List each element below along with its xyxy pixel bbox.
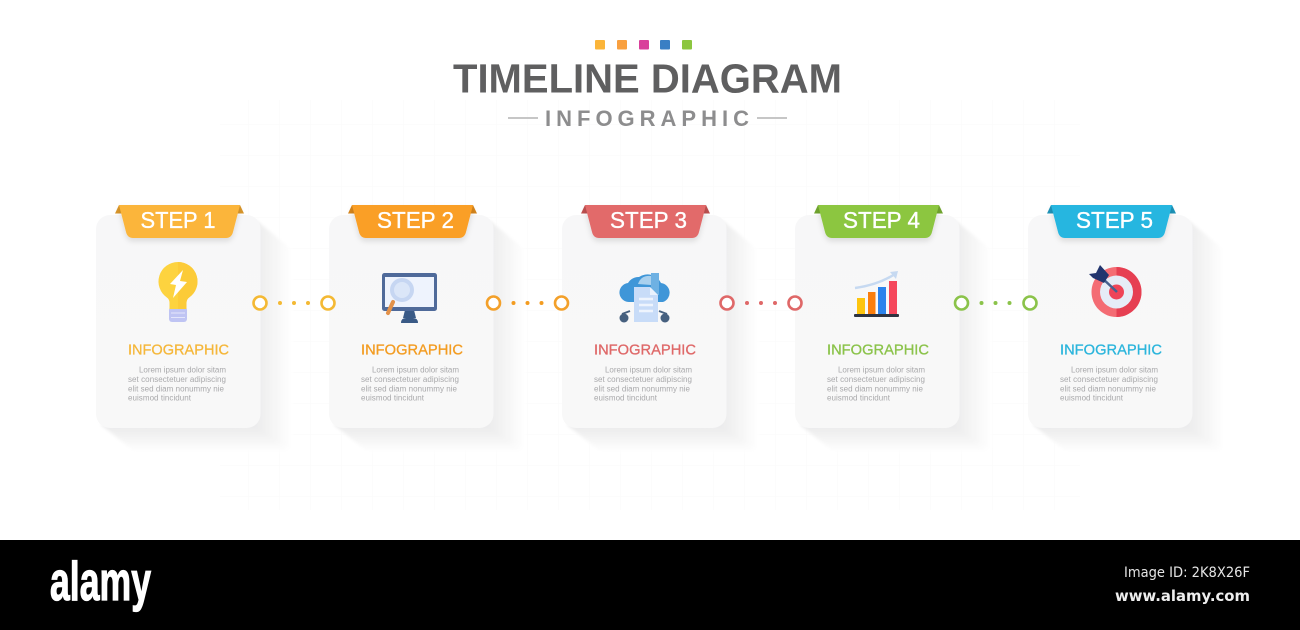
body text: euismod tincidunt	[594, 394, 658, 402]
icon: bar chart with arrow	[854, 271, 899, 317]
body text	[128, 366, 226, 402]
step ribbon	[348, 205, 477, 238]
card shadow	[333, 220, 525, 452]
body text: set consectetuer adipiscing	[128, 375, 226, 384]
card shadow	[799, 220, 991, 452]
connector 3	[720, 296, 802, 310]
card	[96, 215, 260, 428]
step ribbon	[581, 205, 710, 238]
card	[795, 215, 960, 428]
body text: set consectetuer adipiscing	[1060, 375, 1158, 384]
icon: light bulb	[159, 262, 197, 322]
step ribbon: STEP 1	[140, 207, 216, 233]
card shadow	[1032, 220, 1224, 452]
step ribbon	[814, 205, 943, 238]
connector 4	[955, 296, 1036, 310]
step ribbon: STEP 2	[377, 207, 454, 233]
body text: elit sed diam nonummy nie	[827, 384, 924, 394]
heading: INFOGRAPHIC	[1060, 342, 1162, 358]
card shadow	[566, 220, 758, 452]
body text: elit sed diam nonummy nie	[361, 384, 458, 394]
website: www.alamy.com	[1115, 587, 1250, 605]
body text: Lorem ipsum dolor sitam	[372, 366, 459, 374]
card shadow	[100, 220, 292, 452]
image id: Image ID: 2K8X26F	[1124, 565, 1250, 581]
panel: step 4	[795, 205, 991, 452]
heading: INFOGRAPHIC	[361, 342, 463, 358]
icon: cloud document	[619, 273, 670, 322]
title: TIMELINE DIAGRAM	[453, 56, 842, 102]
card	[562, 215, 726, 428]
panel: step 5	[1028, 205, 1224, 452]
body text: euismod tincidunt	[827, 394, 891, 402]
step ribbon	[1047, 205, 1176, 238]
icon: monitor with magnifier	[382, 273, 437, 323]
step ribbon: STEP 4	[843, 207, 920, 233]
body text	[594, 366, 692, 402]
body text: euismod tincidunt	[361, 394, 425, 402]
body text: Lorem ipsum dolor sitam	[139, 366, 226, 374]
panel: step 2	[329, 205, 525, 452]
body text: euismod tincidunt	[1060, 394, 1124, 402]
panel: step 1	[96, 205, 292, 452]
card	[1028, 215, 1192, 428]
body text: elit sed diam nonummy nie	[594, 384, 691, 394]
icon: target with dart	[1089, 265, 1142, 317]
body text: elit sed diam nonummy nie	[128, 384, 225, 394]
logo: alamy: alamy	[50, 550, 151, 612]
body text: set consectetuer adipiscing	[361, 375, 459, 384]
heading: INFOGRAPHIC	[594, 342, 696, 358]
subtitle: INFOGRAPHIC	[545, 106, 749, 131]
body text	[827, 366, 925, 402]
connector 2	[487, 296, 568, 310]
panel: step 3	[562, 205, 758, 452]
body text: Lorem ipsum dolor sitam	[605, 366, 692, 374]
footer bar	[0, 540, 1300, 630]
body text	[361, 366, 459, 402]
body text: set consectetuer adipiscing	[594, 375, 692, 384]
body text: elit sed diam nonummy nie	[1060, 384, 1157, 394]
step ribbon: STEP 3	[610, 207, 687, 233]
step ribbon	[115, 205, 244, 238]
heading: INFOGRAPHIC	[827, 342, 929, 358]
card	[329, 215, 494, 428]
body text: Lorem ipsum dolor sitam	[1071, 366, 1158, 374]
colour squares	[595, 40, 692, 50]
body text: Lorem ipsum dolor sitam	[838, 366, 925, 374]
step ribbon: STEP 5	[1076, 207, 1153, 233]
body text: euismod tincidunt	[128, 394, 192, 402]
heading: INFOGRAPHIC	[128, 342, 229, 358]
body text: set consectetuer adipiscing	[827, 375, 925, 384]
body text	[1060, 366, 1158, 402]
connector 1	[254, 296, 334, 310]
